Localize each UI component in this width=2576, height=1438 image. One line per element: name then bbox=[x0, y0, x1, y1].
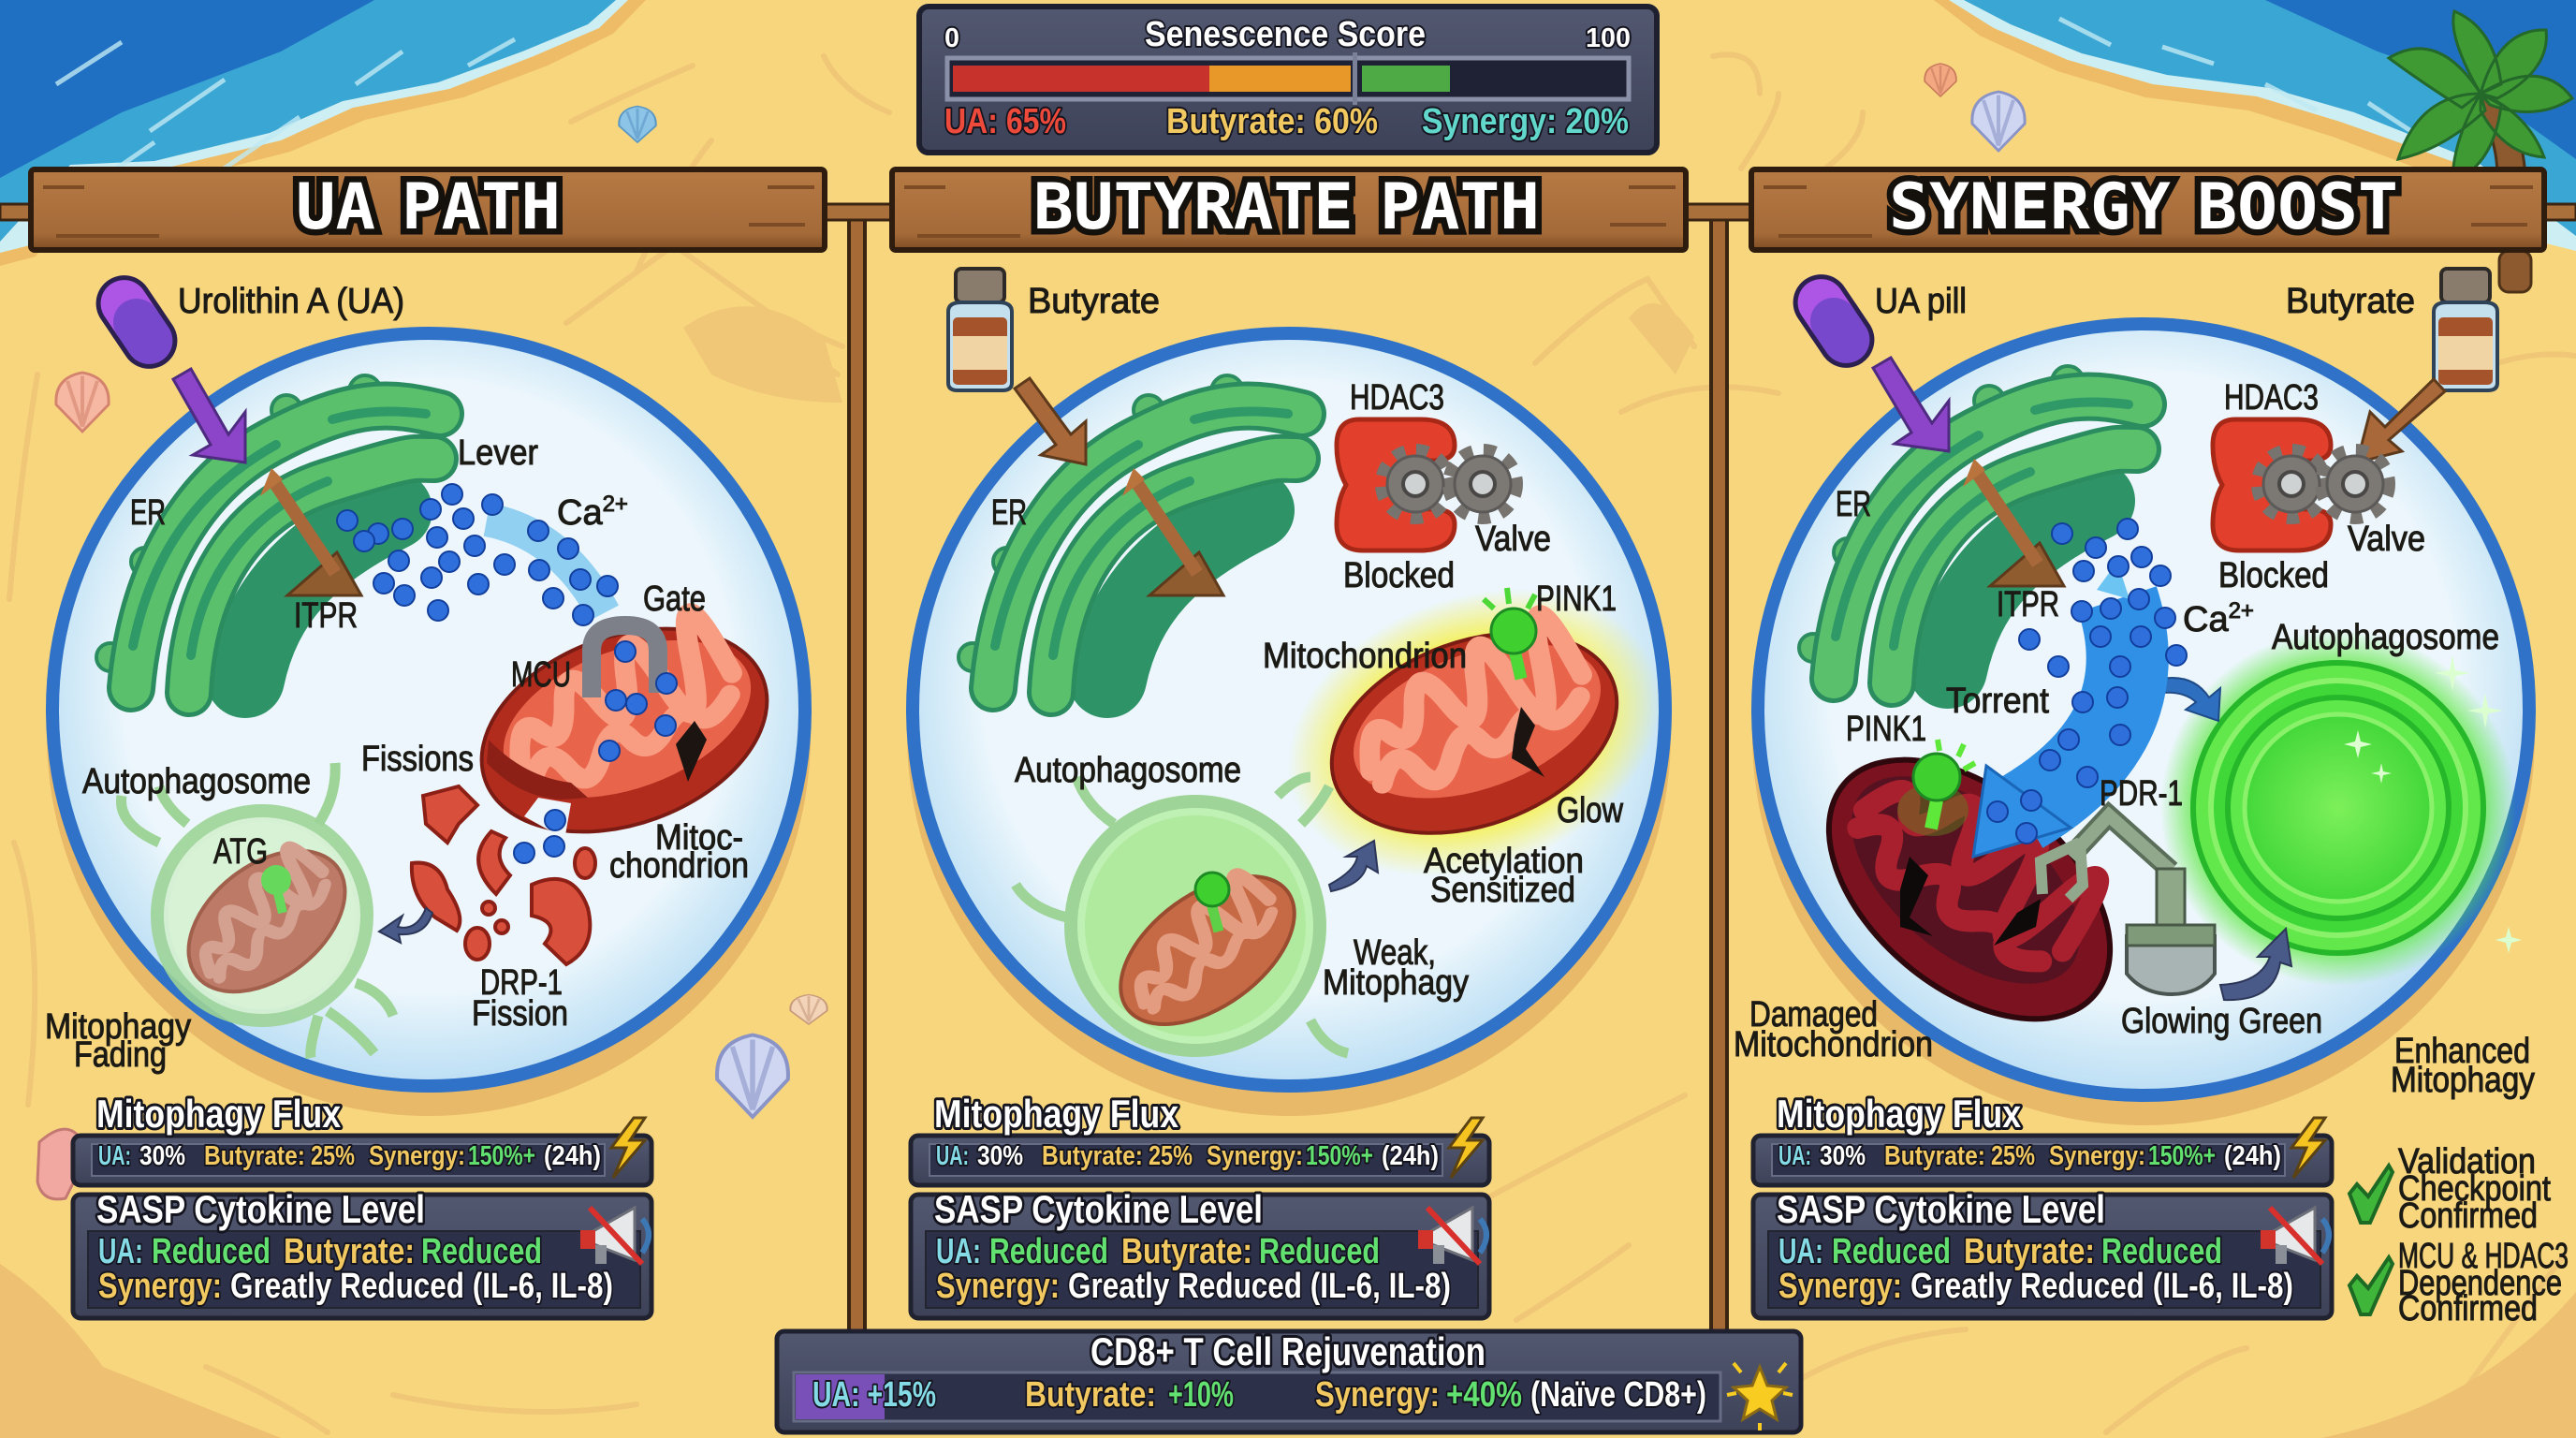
icon: butyrate bottle bbox=[2434, 269, 2497, 390]
mitophagy flux panel bbox=[73, 1092, 651, 1185]
pathway labels: Mitophagy bbox=[1323, 963, 1469, 1003]
panel: CD8+ T cell rejuvenation: (Naïve CD8+) bbox=[1530, 1375, 1706, 1415]
cell shadow bbox=[1752, 343, 2535, 1125]
pathway labels bbox=[45, 282, 749, 1075]
icon: lilac shell bbox=[1972, 92, 2025, 151]
SASP cytokine panel: SASP Cytokine Level bbox=[96, 1187, 425, 1231]
icon: damaged mitochondrion bbox=[1780, 709, 2159, 1070]
cell circle bbox=[913, 333, 1665, 1086]
SASP cytokine panel: Butyrate: bbox=[284, 1232, 415, 1271]
calcium torrent arrow bbox=[1973, 562, 2130, 857]
arrow: fragments to autophagosome bbox=[379, 908, 432, 943]
dependence note: Confirmed bbox=[2398, 1289, 2538, 1328]
panel: Synergy boost bbox=[1734, 169, 2569, 1328]
pathway labels: Mitochondrion bbox=[1734, 1025, 1933, 1064]
pathway labels: ITPR bbox=[1997, 585, 2059, 624]
pathway labels: ATG bbox=[213, 832, 268, 872]
pathway labels: PINK1 bbox=[1846, 710, 1926, 749]
sand drift: bottom left bbox=[0, 1264, 281, 1438]
validation checkpoint note: Validation bbox=[2398, 1142, 2536, 1181]
mitophagy flux panel: Synergy: bbox=[2049, 1141, 2145, 1171]
icon: valve gears bbox=[1381, 449, 1517, 519]
panel: CD8+ T cell rejuvenation: +10% bbox=[1168, 1375, 1234, 1415]
pathway labels: Fissions bbox=[361, 740, 474, 779]
SASP cytokine panel: UA: bbox=[936, 1232, 981, 1271]
pathway labels: UA pill bbox=[1875, 282, 1967, 321]
mitochondrion fragments bbox=[412, 786, 595, 964]
icon: PINK1 bbox=[1913, 740, 1975, 829]
pathway labels: Glow bbox=[1557, 791, 1623, 830]
icon: palm tree bbox=[2389, 11, 2572, 292]
mitophagy flux panel: Synergy: bbox=[369, 1141, 465, 1171]
SASP cytokine panel: Butyrate: bbox=[1964, 1232, 2095, 1271]
pathway labels: HDAC3 bbox=[2224, 378, 2319, 418]
mitophagy flux panel: 150%+ bbox=[2148, 1141, 2216, 1171]
pathway labels: Butyrate bbox=[1028, 282, 1160, 321]
SASP cytokine panel: Reduced bbox=[1259, 1232, 1380, 1271]
icon: large lilac shell bbox=[717, 1035, 788, 1117]
pathway labels: 2+ bbox=[603, 492, 628, 517]
pathway labels: Mitophagy bbox=[45, 1007, 191, 1047]
mitophagy flux panel: Synergy: bbox=[1207, 1141, 1303, 1171]
panel: senescence score: Senescence Score bbox=[1145, 15, 1426, 54]
icon: HDAC3 blocked enzyme bbox=[1337, 419, 1455, 550]
pathway labels: ITPR bbox=[294, 596, 358, 636]
icon: butyrate bottle bbox=[948, 269, 1012, 390]
calcium ions bbox=[337, 484, 618, 625]
icon: lever bbox=[260, 468, 361, 595]
icon: blue shell bbox=[619, 107, 656, 142]
mitophagy flux panel: 25% bbox=[311, 1141, 355, 1171]
pathway labels: HDAC3 bbox=[1350, 378, 1444, 418]
SASP cytokine panel: Reduced bbox=[2101, 1232, 2222, 1271]
pathway labels: Autophagosome bbox=[2272, 618, 2499, 657]
arrow: bottle to gears bbox=[2357, 379, 2445, 462]
panel: CD8+ T cell rejuvenation: Butyrate: bbox=[1025, 1375, 1156, 1415]
pathway labels: Mitoc- bbox=[655, 818, 743, 858]
SASP cytokine panel bbox=[1753, 1187, 2332, 1318]
dependence note bbox=[2349, 1237, 2569, 1328]
pathway labels: Mitophagy bbox=[2391, 1061, 2535, 1100]
panel: senescence score: Synergy: 20% bbox=[1422, 102, 1629, 141]
mitophagy flux panel: Mitophagy Flux bbox=[934, 1092, 1179, 1136]
arrow: robot arm to portal bbox=[2220, 929, 2291, 1000]
pathway labels: Glowing Green bbox=[2121, 1002, 2322, 1041]
icon: autophagosome bbox=[1016, 777, 1348, 1054]
pathway labels: Acetylation bbox=[1424, 842, 1584, 881]
icon: valve gears bbox=[2257, 449, 2390, 519]
arrow: sensitisation bbox=[1329, 841, 1378, 891]
SASP cytokine panel: Greatly Reduced (IL-6, IL-8) bbox=[1068, 1267, 1451, 1306]
icon: UA pill bbox=[124, 303, 149, 341]
icon: endoplasmic reticulum bbox=[96, 375, 440, 693]
icon: gate bbox=[592, 625, 658, 697]
mitophagy flux panel: 30% bbox=[139, 1141, 185, 1171]
heading: Butyrate path plank bbox=[892, 169, 1686, 250]
pathway labels: chondrion bbox=[609, 846, 749, 886]
pathway labels: Autophagosome bbox=[82, 762, 311, 801]
SASP cytokine panel: Synergy: bbox=[1778, 1267, 1902, 1306]
panel: Butyrate path bbox=[892, 169, 1701, 1318]
pathway labels bbox=[1734, 282, 2535, 1100]
sea: top right bbox=[1934, 0, 2576, 251]
mitophagy flux panel bbox=[1753, 1092, 2332, 1185]
panel: UA path bbox=[31, 169, 825, 1318]
SASP cytokine panel: Synergy: bbox=[936, 1267, 1060, 1306]
sand drift: bottom right bbox=[2321, 1292, 2576, 1438]
heading: Butyrate path plank: BUTYRATE PATH bbox=[1033, 170, 1540, 244]
heading: Synergy boost plank: SYNERGY BOOST bbox=[1889, 170, 2398, 244]
mitophagy flux panel: Butyrate: bbox=[204, 1141, 305, 1171]
mitophagy flux panel: UA: bbox=[1778, 1141, 1811, 1171]
pathway labels: Urolithin A (UA) bbox=[178, 282, 404, 321]
arrow: bottle to ER bbox=[1015, 378, 1086, 464]
pathway labels: Autophagosome bbox=[1015, 751, 1241, 790]
mitophagy flux panel: Butyrate: bbox=[1884, 1141, 1985, 1171]
pathway labels: Lever bbox=[458, 433, 538, 473]
icon: pink shell bbox=[56, 373, 109, 432]
icon: coral bbox=[37, 1129, 80, 1199]
panel: CD8+ T cell rejuvenation: UA: +15% bbox=[812, 1375, 936, 1415]
heading: UA path plank bbox=[31, 169, 825, 250]
arrow: pill to ER bbox=[173, 369, 245, 462]
pathway labels: Blocked bbox=[1343, 556, 1455, 595]
arrow: torrent to portal bbox=[2150, 678, 2220, 721]
pathway labels: Ca bbox=[2183, 600, 2229, 639]
pathway labels: ER bbox=[991, 493, 1027, 533]
pathway labels: Torrent bbox=[1946, 682, 2049, 721]
SASP cytokine panel: UA: bbox=[98, 1232, 143, 1271]
icon: PINK1 bbox=[1484, 588, 1536, 679]
arrow: pill to ER bbox=[1873, 358, 1949, 451]
cell circle bbox=[52, 333, 805, 1086]
SASP cytokine panel bbox=[911, 1187, 1489, 1318]
SASP cytokine panel: Reduced bbox=[1832, 1232, 1951, 1271]
pathway labels: Weak, bbox=[1354, 933, 1436, 973]
score bar bbox=[947, 52, 1629, 105]
icon: orange shell bbox=[1925, 64, 1956, 96]
mitophagy flux panel: Mitophagy Flux bbox=[1777, 1092, 2022, 1136]
panel: senescence score: 100 bbox=[1586, 23, 1631, 53]
cell shadow bbox=[907, 352, 1671, 1116]
mitophagy flux panel: UA: bbox=[98, 1141, 131, 1171]
pathway labels: Butyrate bbox=[2286, 282, 2415, 321]
icon: green autophagosome portal bbox=[2160, 630, 2522, 986]
icon: endoplasmic reticulum bbox=[959, 375, 1302, 693]
validation checkpoint note: Checkpoint bbox=[2398, 1169, 2551, 1209]
pathway labels: MCU bbox=[511, 655, 571, 695]
calcium ions bbox=[1987, 519, 2187, 844]
pathway labels: PINK1 bbox=[1536, 580, 1617, 619]
pathway labels: Fission bbox=[472, 994, 568, 1034]
mitophagy flux panel: 25% bbox=[1991, 1141, 2035, 1171]
pathway labels: Valve bbox=[1475, 520, 1551, 559]
pathway labels: Damaged bbox=[1749, 995, 1878, 1034]
SASP cytokine panel: SASP Cytokine Level bbox=[934, 1187, 1263, 1231]
SASP cytokine panel: Greatly Reduced (IL-6, IL-8) bbox=[230, 1267, 613, 1306]
icon: red mitochondrion with fission damage bbox=[453, 592, 796, 869]
panel: senescence score: Butyrate: 60% bbox=[1166, 102, 1378, 141]
icon: lever bbox=[1963, 459, 2064, 586]
SASP cytokine panel: Synergy: bbox=[98, 1267, 222, 1306]
validation checkpoint note: Confirmed bbox=[2398, 1196, 2538, 1236]
mitophagy flux panel bbox=[911, 1092, 1489, 1185]
calcium stream bbox=[487, 520, 604, 613]
pathway labels: Sensitized bbox=[1430, 871, 1575, 910]
icon: lever bbox=[1122, 468, 1223, 595]
mitophagy flux panel: 30% bbox=[1820, 1141, 1866, 1171]
pathway labels: Blocked bbox=[2218, 556, 2329, 595]
icon: faded autophagosome bbox=[122, 763, 393, 1058]
cell circle bbox=[1758, 324, 2529, 1095]
mitophagy flux panel: 25% bbox=[1149, 1141, 1193, 1171]
mitophagy flux panel: 150%+ bbox=[1306, 1141, 1373, 1171]
icon: endoplasmic reticulum bbox=[1799, 366, 2143, 683]
SASP cytokine panel: UA: bbox=[1778, 1232, 1823, 1271]
panel: CD8+ T cell rejuvenation: CD8+ T Cell Rejuvenation bbox=[1090, 1329, 1486, 1373]
pathway labels: 2+ bbox=[2229, 598, 2254, 624]
validation checkpoint note bbox=[2349, 1142, 2551, 1236]
pathway labels: Valve bbox=[2348, 520, 2425, 559]
mitophagy flux panel: 150%+ bbox=[468, 1141, 535, 1171]
divider posts and rail bbox=[0, 204, 2576, 1334]
SASP cytokine panel: Reduced bbox=[152, 1232, 271, 1271]
SASP cytokine panel: Butyrate: bbox=[1121, 1232, 1252, 1271]
pathway labels bbox=[991, 282, 1623, 1003]
mitophagy flux panel: (24h) bbox=[544, 1141, 601, 1171]
pathway labels: ER bbox=[1836, 485, 1871, 524]
icon: star bbox=[1727, 1363, 1793, 1431]
panel: senescence score: 0 bbox=[944, 23, 959, 53]
pathway labels: PDR-1 bbox=[2100, 774, 2183, 814]
SASP cytokine panel: Reduced bbox=[421, 1232, 542, 1271]
SASP cytokine panel: Reduced bbox=[989, 1232, 1108, 1271]
mitophagy flux panel: UA: bbox=[936, 1141, 969, 1171]
panel: senescence score bbox=[919, 7, 1657, 153]
pathway labels: Ca bbox=[557, 493, 603, 533]
mitophagy flux panel: (24h) bbox=[1382, 1141, 1439, 1171]
calcium ions inside mitochondrion bbox=[514, 641, 677, 863]
sea: top left bbox=[0, 0, 646, 266]
panel: senescence score: UA: 65% bbox=[944, 102, 1066, 141]
mitophagy flux panel: Butyrate: bbox=[1042, 1141, 1143, 1171]
pathway labels: Gate bbox=[643, 580, 706, 619]
panel: CD8+ T cell rejuvenation bbox=[777, 1329, 1801, 1432]
icon: HDAC3 blocked enzyme bbox=[2213, 419, 2331, 550]
pathway labels: DRP-1 bbox=[480, 963, 563, 1003]
pathway labels: Fading bbox=[74, 1035, 167, 1075]
mitophagy flux panel: (24h) bbox=[2224, 1141, 2281, 1171]
panel: CD8+ T cell rejuvenation: +40% bbox=[1446, 1375, 1522, 1415]
SASP cytokine panel: Greatly Reduced (IL-6, IL-8) bbox=[1910, 1267, 2293, 1306]
icon: PDR-1 robot arm bbox=[2041, 815, 2215, 994]
icon: mitochondrion glow bbox=[1248, 540, 1701, 926]
icon: beige shell bbox=[790, 994, 827, 1024]
heading: Synergy boost plank bbox=[1751, 169, 2544, 250]
mitophagy flux panel: 30% bbox=[977, 1141, 1023, 1171]
heading: UA path plank: UA PATH bbox=[296, 170, 561, 244]
mitophagy flux panel: Mitophagy Flux bbox=[96, 1092, 342, 1136]
icon: UA pill bbox=[1822, 302, 1846, 340]
pathway labels: ER bbox=[130, 493, 166, 533]
SASP cytokine panel bbox=[73, 1187, 651, 1318]
pathway labels: Enhanced bbox=[2394, 1032, 2530, 1071]
icon: mitochondrion sensitised bbox=[1304, 596, 1645, 870]
cell shadow bbox=[47, 352, 811, 1116]
panel: CD8+ T cell rejuvenation: Synergy: bbox=[1315, 1375, 1440, 1415]
pathway labels: Mitochondrion bbox=[1263, 637, 1467, 676]
SASP cytokine panel: SASP Cytokine Level bbox=[1777, 1187, 2105, 1231]
